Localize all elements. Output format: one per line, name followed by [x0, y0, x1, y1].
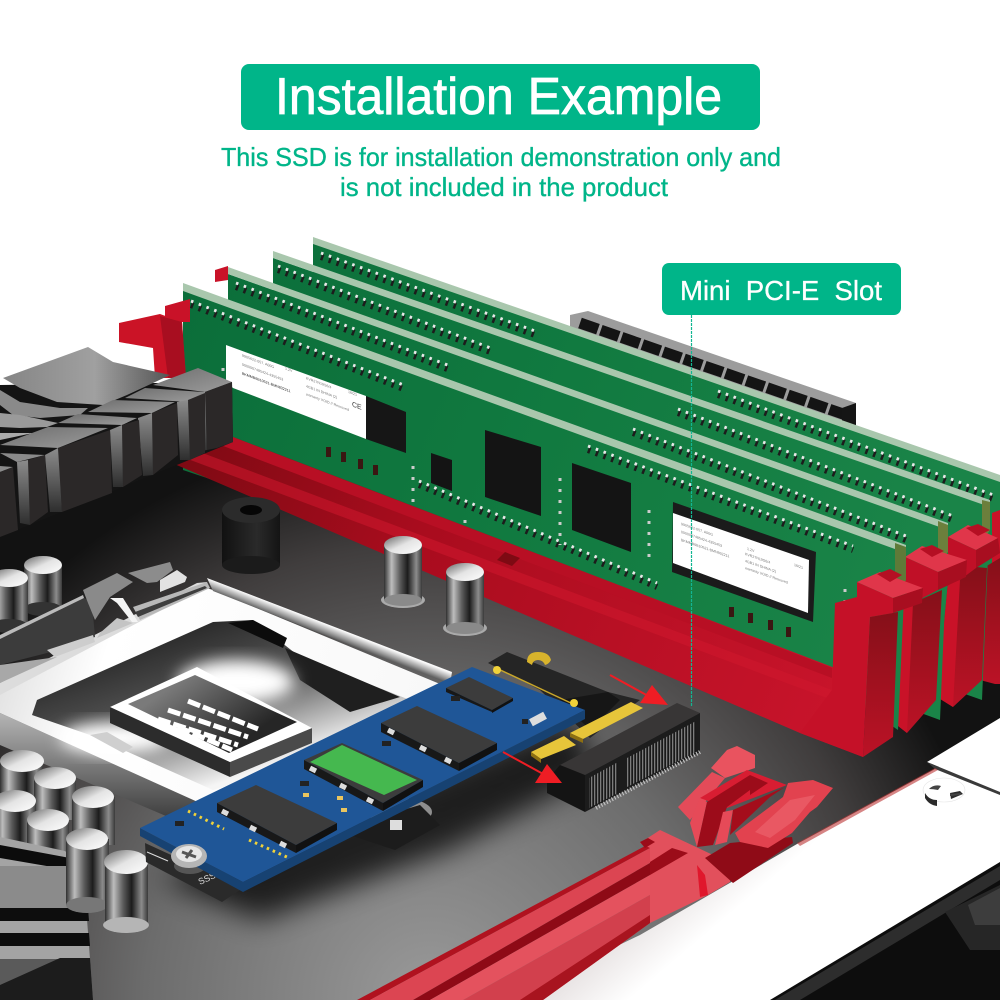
SSD tab with screw: SSS	[197, 870, 217, 887]
heading pill: Installation Example	[275, 68, 722, 126]
subtitle text: is not included in the product	[340, 172, 669, 202]
Mini PCI-E connector	[547, 703, 700, 812]
memory label left: 16/21	[348, 390, 357, 397]
SSD tab with screw	[145, 843, 243, 902]
gold fingers	[531, 702, 643, 763]
white metal plate lower right	[505, 718, 1000, 1000]
slot head	[640, 830, 730, 923]
memory label right: 4GB1 IN DHINA (2)	[745, 559, 776, 574]
memory label right: KVR27N19S6/4	[745, 552, 770, 565]
memory label left: 4GB1 IN DHINA (2)	[306, 384, 337, 400]
SSD green chip	[304, 743, 423, 811]
fin 1	[153, 368, 233, 453]
SSD chip	[381, 706, 497, 771]
socket chip	[110, 667, 312, 777]
memory label left: 9905622-057. A00G	[242, 354, 274, 369]
fin 5	[0, 427, 112, 512]
subtitle text	[221, 142, 781, 202]
callout: Mini PCI-E Slot: Mini PCI-E Slot	[680, 275, 882, 306]
SSD solder dots	[188, 667, 573, 858]
socket lower side	[0, 713, 330, 822]
top surface	[3, 347, 170, 405]
callout: Mini PCI-E Slot	[662, 263, 901, 315]
memory chips	[431, 430, 631, 552]
SSD controller small chip	[446, 677, 513, 713]
socket frame	[0, 585, 440, 803]
CPU socket	[0, 562, 452, 822]
memory label left: CE	[352, 399, 362, 412]
memory clip 2	[893, 545, 967, 733]
lower red memory slot	[357, 830, 730, 1000]
dark components lower right	[770, 862, 1000, 1000]
memory label left	[226, 345, 406, 453]
red latch	[678, 746, 833, 883]
screw on metal plate	[923, 778, 965, 806]
capacitors upper left	[0, 556, 62, 633]
memory module 4	[313, 237, 1000, 600]
heatsink upper left	[0, 347, 233, 537]
memory label right: 1.2V	[747, 547, 755, 553]
gold screw	[527, 652, 551, 665]
SSD small parts	[175, 666, 578, 826]
memory module 3	[273, 251, 990, 700]
capacitors near memory	[381, 536, 487, 636]
heatsink lower left	[0, 837, 93, 1000]
subtitle text: This SSD is for installation demonstration only and	[221, 142, 781, 172]
SSD standoff under board	[335, 798, 440, 850]
connector pins	[627, 721, 696, 787]
memory slot front	[172, 437, 863, 757]
memory label right	[672, 502, 816, 622]
SSD shadow on board	[160, 720, 600, 920]
socket rail	[207, 578, 452, 684]
black standoff	[222, 497, 280, 574]
fin 7	[0, 466, 18, 537]
red arrow top	[610, 675, 668, 705]
memory label left: 0000007485424-4355453	[242, 363, 283, 382]
callout leader line	[690, 315, 692, 706]
memory label left: KVR27N19S6/4	[306, 376, 331, 390]
memory module 1 front with labels and chips	[183, 283, 906, 730]
memory label left: 1.2V	[285, 367, 293, 373]
memory clip 4	[980, 510, 1000, 684]
capacitors front lower left	[66, 828, 149, 933]
red tabs behind modules	[119, 266, 228, 378]
fin 4	[58, 414, 142, 487]
memory module 2	[228, 267, 948, 720]
memory label right: 16/21	[794, 563, 803, 570]
memory pin rows	[191, 301, 853, 605]
red arrow bottom	[503, 752, 562, 783]
memory label right: warranty VOID // Removed	[745, 566, 788, 585]
fin 2	[125, 388, 205, 460]
fin 6	[0, 453, 48, 525]
motherboard base	[0, 440, 1000, 1000]
retention lever	[0, 562, 210, 683]
memory label right: 0000007485424-4355453	[681, 530, 722, 548]
memory label right: BKMMB6B10521-BMN832211	[681, 538, 729, 559]
memory label right: 9905622-057. A00G	[681, 522, 713, 537]
capacitors lower left	[0, 750, 115, 860]
SSD chip	[217, 785, 337, 853]
socket cavity	[32, 620, 410, 790]
fin 3	[88, 400, 178, 476]
small components	[326, 447, 791, 637]
memory label left: warranty VOID // Removed	[306, 392, 349, 412]
ATX power connector behind memory	[570, 311, 856, 440]
SSD board	[140, 666, 585, 902]
memory clip 3	[937, 524, 1000, 707]
M.2 socket	[488, 652, 640, 738]
memory clip 1 front	[800, 569, 923, 757]
memory label left: BKMMB6B10521-BMN832211	[242, 372, 291, 393]
screw	[171, 844, 207, 868]
